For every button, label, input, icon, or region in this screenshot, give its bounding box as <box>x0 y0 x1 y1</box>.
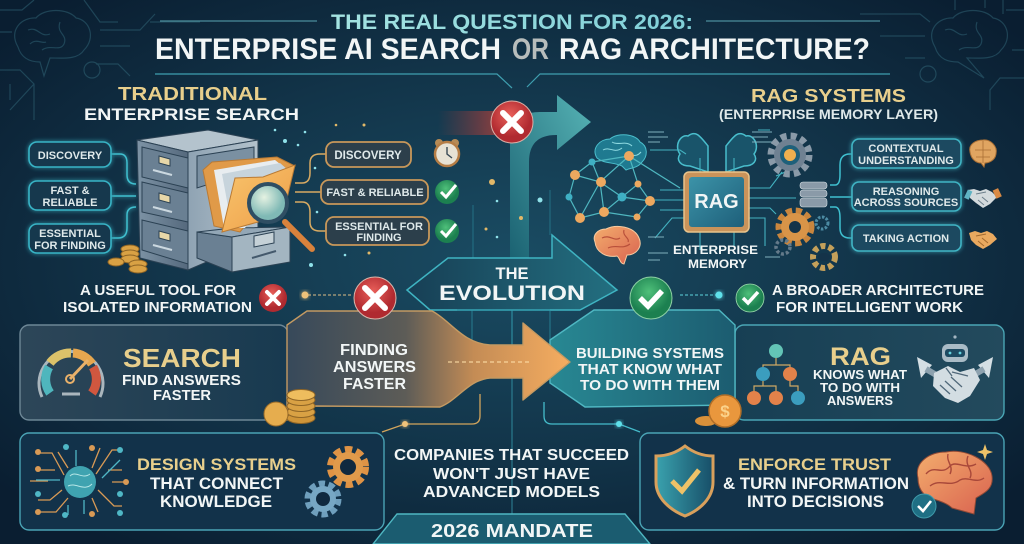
pills right <box>321 142 429 245</box>
text: companies that succeed: COMPANIES THAT SUCCEED <box>394 447 629 464</box>
dotted link to big x <box>308 294 353 296</box>
text: turn information into decisions <box>723 474 909 511</box>
pill: contextual understanding <box>852 139 961 168</box>
central circuit line <box>511 310 513 540</box>
icon: blue gear bottom <box>308 484 338 514</box>
text: companies that succeed <box>394 447 629 501</box>
background circuit right with brain <box>860 0 1024 110</box>
panel: the evolution chevron <box>407 235 617 310</box>
icon: alarm clock <box>435 139 459 166</box>
pill: discovery: DISCOVERY <box>38 150 103 162</box>
red trail to rejection mark <box>438 111 498 135</box>
glow dot left <box>302 292 308 298</box>
icon: small x mark <box>259 284 287 312</box>
pill: taking action: TAKING ACTION <box>863 233 949 245</box>
label: enterprise memory: MEMORY <box>688 257 747 271</box>
connectors left <box>111 154 136 238</box>
text: broader architecture: FOR INTELLIGENT WORK <box>776 299 963 316</box>
icon: orange gear bottom <box>331 450 365 484</box>
panel: RAG systems <box>566 86 1002 271</box>
pill: essential for finding orange <box>326 217 429 245</box>
title line one: THE REAL QUESTION FOR 2026: <box>331 11 693 34</box>
pill: reasoning across sources <box>852 182 961 211</box>
pills left <box>29 142 111 253</box>
icon: handshake gray <box>964 188 1002 208</box>
pill: essential for finding orange: FINDING <box>356 232 402 244</box>
icon: magnifier <box>249 184 312 249</box>
chip traces <box>648 130 796 260</box>
icon: folder with documents <box>203 157 295 232</box>
text: knows what to do with answers: TO DO WITH <box>820 380 900 395</box>
banner: 2026 mandate <box>373 514 650 544</box>
heading: enterprise memory layer: (ENTERPRISE MEMORY LAYER) <box>719 106 938 122</box>
text: turn information into decisions: INTO DECISIONS <box>747 492 884 511</box>
icon: coin stack left <box>264 390 315 426</box>
icon: gold gear <box>813 246 835 268</box>
icon: hierarchy tree <box>747 344 805 405</box>
icon: shield <box>656 446 713 516</box>
text: building systems that know what to do with them <box>576 345 724 394</box>
icon: handshake orange <box>969 231 997 249</box>
icon: sparkle <box>977 444 993 460</box>
icon: orange gear <box>779 211 811 243</box>
text: knows what to do with answers: ANSWERS <box>827 393 893 408</box>
connectors to right pills <box>830 154 852 238</box>
icon: RAG chip <box>684 172 749 232</box>
text: find answers faster: FASTER <box>153 387 211 404</box>
text: companies that succeed: WON'T JUST HAVE <box>433 466 590 483</box>
dotted link right <box>680 294 718 296</box>
text: broader architecture: A BROADER ARCHITECTURE <box>772 282 984 299</box>
panel: search <box>20 325 288 420</box>
icon: gauge <box>39 351 103 397</box>
panel: RAG <box>735 325 1004 420</box>
text: knows what to do with answers: KNOWS WHAT <box>813 367 907 382</box>
icon: large x mark <box>354 277 396 319</box>
text: building systems that know what to do with them: BUILDING SYSTEMS <box>576 345 724 362</box>
text: building systems that know what to do with them: TO DO WITH THEM <box>580 377 720 394</box>
decorative particles <box>274 124 542 267</box>
panel: enforce trust <box>640 433 1004 530</box>
indicator: useless tool text: ISOLATED INFORMATION <box>63 299 252 316</box>
pill: discovery orange: DISCOVERY <box>334 150 402 162</box>
pill: essential for finding: ESSENTIAL <box>39 228 101 240</box>
pill: reasoning across sources: ACROSS SOURCES <box>854 197 958 209</box>
icon: orange brain <box>594 226 640 264</box>
circuit right lower <box>544 402 640 432</box>
heading: RAG: RAG <box>830 343 891 371</box>
heading: enterprise search: ENTERPRISE SEARCH <box>84 105 299 124</box>
icon: small check on brain <box>912 494 936 518</box>
arrow glow center <box>448 361 530 363</box>
heading: search: SEARCH <box>123 345 241 373</box>
connectors right <box>295 154 326 231</box>
icon: brain small <box>970 140 996 167</box>
text: finding answers faster <box>333 342 416 393</box>
label: enterprise memory: ENTERPRISE <box>673 243 758 257</box>
icon: small check mark <box>736 284 764 312</box>
text: finding answers faster: FINDING <box>340 342 408 359</box>
pill: essential for finding orange: ESSENTIAL FOR <box>335 221 423 233</box>
text: that connect knowledge: THAT CONNECT <box>150 474 284 493</box>
text: evolution: EVOLUTION <box>439 281 585 305</box>
pill: reasoning across sources: REASONING <box>873 186 939 198</box>
pill: fast and reliable orange: FAST & RELIABLE <box>326 187 424 199</box>
icon: gold coins left <box>108 245 147 273</box>
text: find answers faster <box>122 372 241 404</box>
text: companies that succeed: ADVANCED MODELS <box>423 484 600 501</box>
indicator: useless tool text: A USEFUL TOOL FOR <box>80 282 236 299</box>
heading: enforce trust: ENFORCE TRUST <box>738 455 892 474</box>
pill: taking action <box>852 225 961 251</box>
icon: rejection mark on upper arrow <box>491 101 533 143</box>
text: broader architecture <box>772 282 984 316</box>
text: building systems that know what to do with them: THAT KNOW WHAT <box>578 361 722 378</box>
pill: fast and reliable: FAST & <box>50 185 90 197</box>
text: finding answers faster: FASTER <box>343 376 406 393</box>
text: knows what to do with answers <box>813 367 907 408</box>
text: find answers faster: FIND ANSWERS <box>122 372 241 389</box>
pill: essential for finding <box>29 224 111 253</box>
arrow: bent teal arrow upward right <box>510 95 591 258</box>
glow dots lower <box>402 421 408 427</box>
icon: teal brain <box>595 135 646 170</box>
title line two: or: OR <box>512 33 549 66</box>
glow dot right <box>716 292 722 298</box>
icon: robot handshake <box>917 335 993 403</box>
icon: gray gear <box>771 136 809 174</box>
pill: essential for finding: FOR FINDING <box>34 240 106 252</box>
text: finding answers faster: ANSWERS <box>333 359 416 376</box>
text: turn information into decisions: & TURN INFORMATION <box>723 474 909 493</box>
icon: neural network <box>566 151 680 223</box>
icon: green check two <box>435 219 459 243</box>
indicator: useless tool text <box>63 282 252 316</box>
pill: fast and reliable: RELIABLE <box>42 197 98 209</box>
circuit left lower <box>382 394 480 432</box>
text: that connect knowledge <box>150 474 284 511</box>
panel: building systems <box>550 310 735 407</box>
label: enterprise memory <box>673 243 758 271</box>
panel: traditional enterprise search <box>29 84 459 273</box>
heading: traditional: TRADITIONAL <box>118 84 267 104</box>
icon: RAG chip: RAG <box>694 191 739 213</box>
heading: design systems: DESIGN SYSTEMS <box>137 455 296 474</box>
banner: 2026 mandate: 2026 MANDATE <box>431 520 593 541</box>
panel: design systems <box>20 433 384 530</box>
pill: contextual understanding: UNDERSTANDING <box>858 155 954 167</box>
icon: database stack <box>800 182 827 207</box>
icon: large check mark <box>630 277 672 319</box>
text: the: THE <box>496 265 528 283</box>
pill: fast and reliable <box>29 181 111 210</box>
icon: file cabinet <box>137 130 290 272</box>
icon: coin right: $ <box>720 402 730 421</box>
title <box>155 11 870 66</box>
background circuit left with brain <box>0 0 200 120</box>
central vertical guide lines <box>473 190 550 258</box>
icon: orange brain large <box>917 451 992 514</box>
panel: finding answers faster arrow <box>287 311 570 420</box>
icon: green check one <box>435 180 459 204</box>
title line two: RAG architecture: RAG ARCHITECTURE? <box>559 33 870 66</box>
icon: circuit brain <box>30 444 129 518</box>
icon: coin right <box>695 395 741 427</box>
title line two: enterprise AI search: ENTERPRISE AI SEARCH <box>155 33 501 66</box>
icon: small blue gear <box>776 217 828 254</box>
text: that connect knowledge: KNOWLEDGE <box>160 492 272 511</box>
pill: contextual understanding: CONTEXTUAL <box>868 143 944 155</box>
icon: circuit brain above chip <box>678 134 756 172</box>
heading: RAG systems: RAG SYSTEMS <box>751 86 906 106</box>
